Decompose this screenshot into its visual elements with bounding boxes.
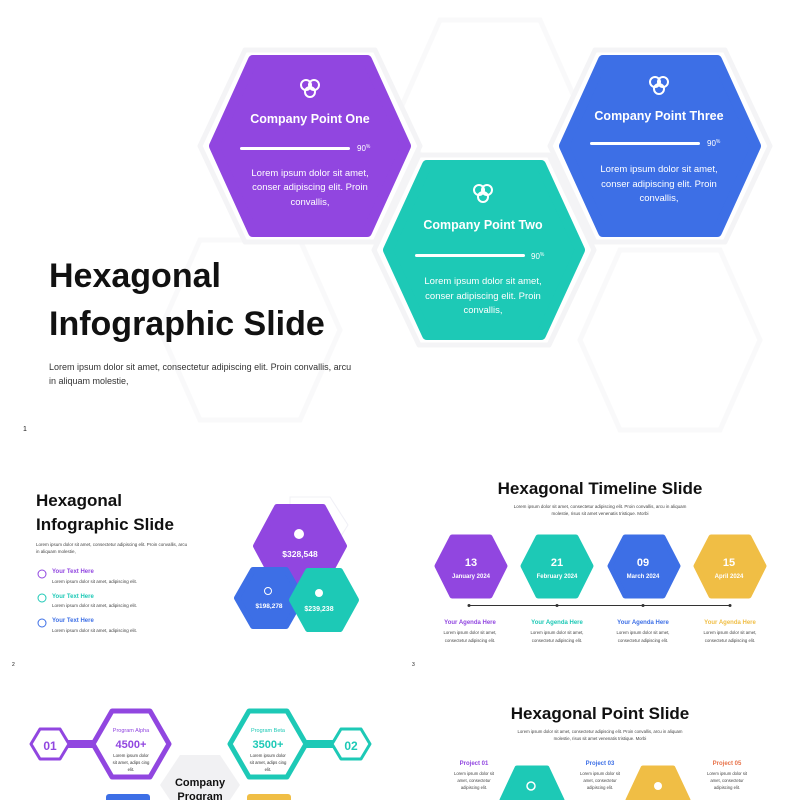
timeline hexes: February 2024 (537, 574, 578, 580)
panel: slide 5 points: adipiscing elit. (461, 785, 487, 790)
list items: Lorem ipsum dolor sit amet, adipiscing elit. (52, 579, 137, 584)
agenda labels: Your Agenda Here (704, 620, 756, 626)
timeline hexes: 09 (637, 557, 649, 569)
program alpha: Program Alpha (113, 728, 150, 734)
text block: slide 1 description: in aliquam molestie, (49, 376, 129, 386)
agenda labels: consectetur adipiscing elit. (445, 638, 495, 643)
timeline hexes: 21 (551, 557, 563, 569)
program beta: Lorem ipsum dolor (250, 753, 286, 758)
panel: slide 3 timeline: 3 (412, 662, 415, 668)
panel: slide 2: in aliquam molestie, (36, 549, 76, 554)
panel: slide 3 timeline: Lorem ipsum dolor sit amet, consectetur adipiscing elit. Proin convallis, arcu in aliquam (514, 504, 687, 509)
panel: slide 5 points: Lorem ipsum dolor sit (707, 771, 748, 776)
program alpha: sit amet, adips cing (113, 760, 150, 765)
timeline hexes (437, 537, 764, 596)
panel: slide 5 points: Project 03 (586, 761, 615, 767)
program beta: 02 (344, 739, 358, 753)
list items: Your Text Here (52, 594, 94, 600)
agenda labels: consectetur adipiscing elit. (705, 638, 755, 643)
panel: slide 1: 1 (23, 426, 27, 433)
title: slide 2: Infographic Slide (36, 515, 174, 534)
hexagon: company point one: convallis, (290, 197, 330, 208)
program beta: 3500+ (253, 739, 283, 751)
hexagon: company point three (550, 50, 770, 242)
agenda labels (443, 620, 757, 643)
agenda labels: Your Agenda Here (617, 620, 669, 626)
panel: slide 3 timeline: molestie, risus sit amet venenatis tristique. Morbi (551, 511, 649, 516)
panel: slide 2 (12, 491, 356, 668)
background pattern (160, 20, 760, 430)
panel: slide 3 timeline (412, 479, 764, 668)
timeline hexes: 15 (723, 557, 735, 569)
list items: Your Text Here (52, 618, 94, 624)
panel: slide 5 points: amet, consectetur (583, 778, 617, 783)
hexagon: company point two: conser adipiscing elit. Proin (425, 291, 541, 302)
panel: slide 5 points: Lorem ipsum dolor sit (580, 771, 621, 776)
hexagon: company point three: Company Point Three (594, 109, 724, 123)
title: slide 5: Hexagonal Point Slide (511, 704, 689, 723)
program beta: Program Beta (251, 728, 286, 734)
agenda labels: consectetur adipiscing elit. (532, 638, 582, 643)
hexagon: company point two (374, 155, 594, 345)
hexagon: company point three: convallis, (639, 193, 679, 204)
agenda labels: Your Agenda Here (531, 620, 583, 626)
title: slide 2: Hexagonal (36, 491, 122, 510)
agenda labels: consectetur adipiscing elit. (618, 638, 668, 643)
hexagon: company point one: % (366, 144, 371, 150)
list items: Lorem ipsum dolor sit amet, adipiscing elit. (52, 603, 137, 608)
timeline hexes: January 2024 (452, 574, 491, 580)
hexagon: company point one: conser adipiscing elit. Proin (252, 182, 368, 193)
panel: slide 4 programs (31, 711, 370, 800)
hexagon: company point one: Lorem ipsum dolor sit amet, (251, 168, 369, 179)
hexagon: company point two: convallis, (463, 305, 503, 316)
title: slide 1: Infographic Slide (49, 305, 325, 343)
hexagon: company point two: % (540, 252, 545, 258)
hexagon: company point two: 90 (531, 252, 540, 261)
program alpha: 01 (43, 739, 57, 753)
agenda labels: Lorem ipsum dolor sit amet, (616, 630, 670, 635)
hexagon: company point three: Lorem ipsum dolor sit amet, (600, 164, 718, 175)
hex cluster (237, 497, 356, 629)
panel: slide 5 points: adipiscing elit. (714, 785, 740, 790)
list items: Lorem ipsum dolor sit amet, adipiscing elit. (52, 628, 137, 633)
panel: slide 5 points: adipiscing elit. (587, 785, 613, 790)
hexagon: company point one: 90 (357, 144, 366, 153)
title: slide 3: Hexagonal Timeline Slide (498, 479, 702, 498)
program beta: sit amet, adips cing (250, 760, 287, 765)
hex cluster: $198,278 (255, 603, 283, 610)
program alpha: 4500+ (116, 739, 146, 751)
program alpha (31, 711, 169, 777)
panel: slide 5 points: Project 05 (713, 761, 742, 767)
program alpha: elit. (128, 767, 134, 772)
list items: Your Text Here (52, 569, 94, 575)
agenda labels: Lorem ipsum dolor sit amet, (703, 630, 757, 635)
hexagon: company point two: Lorem ipsum dolor sit amet, (424, 276, 542, 287)
timeline hexes: March 2024 (627, 574, 660, 580)
program beta (230, 711, 370, 777)
panel: slide 5 points: amet, consectetur (710, 778, 744, 783)
panel: slide 2: 2 (12, 662, 15, 668)
agenda labels: Lorem ipsum dolor sit amet, (530, 630, 584, 635)
hexagon: company point three: conser adipiscing elit. Proin (601, 179, 717, 190)
panel: slide 5 points (454, 704, 748, 800)
panel: slide 5 points: Lorem ipsum dolor sit (454, 771, 495, 776)
program alpha: Lorem ipsum dolor (113, 753, 149, 758)
panel: slide 5 points: molestie, risus sit amet venenatis tristique. Morbi (554, 736, 646, 741)
timeline line (468, 604, 732, 607)
hexagon: company point one: Company Point One (250, 112, 370, 126)
panel: slide 2: Lorem ipsum dolor sit amet, consectetur adipiscing elit. Proin convallis, arcu (36, 542, 188, 547)
list items (38, 569, 137, 633)
hex cluster: $239,238 (304, 606, 334, 613)
company program label: Company (175, 777, 226, 789)
timeline hexes: April 2024 (715, 574, 744, 580)
hexagon: company point one (200, 50, 420, 242)
timeline hexes: 13 (465, 557, 477, 569)
hex cluster: $328,548 (282, 549, 318, 559)
text block: slide 1 description: Lorem ipsum dolor sit amet, consectetur adipiscing elit. Proin convallis, arcu (49, 362, 351, 372)
agenda labels: Lorem ipsum dolor sit amet, (443, 630, 497, 635)
program beta: elit. (265, 767, 271, 772)
panel: slide 5 points: amet, consectetur (457, 778, 491, 783)
hexagon: company point three: % (716, 139, 721, 145)
agenda labels: Your Agenda Here (444, 620, 496, 626)
panel: slide 1 (23, 50, 770, 433)
hexagon: company point two: Company Point Two (423, 218, 543, 232)
hexagon: company point three: 90 (707, 139, 716, 148)
title: slide 1: Hexagonal (49, 257, 221, 295)
panel: slide 5 points: Lorem ipsum dolor sit amet, consectetur adipiscing elit. Proin convallis, arcu in aliquam (517, 729, 683, 734)
panel: slide 5 points: Project 01 (460, 761, 489, 767)
